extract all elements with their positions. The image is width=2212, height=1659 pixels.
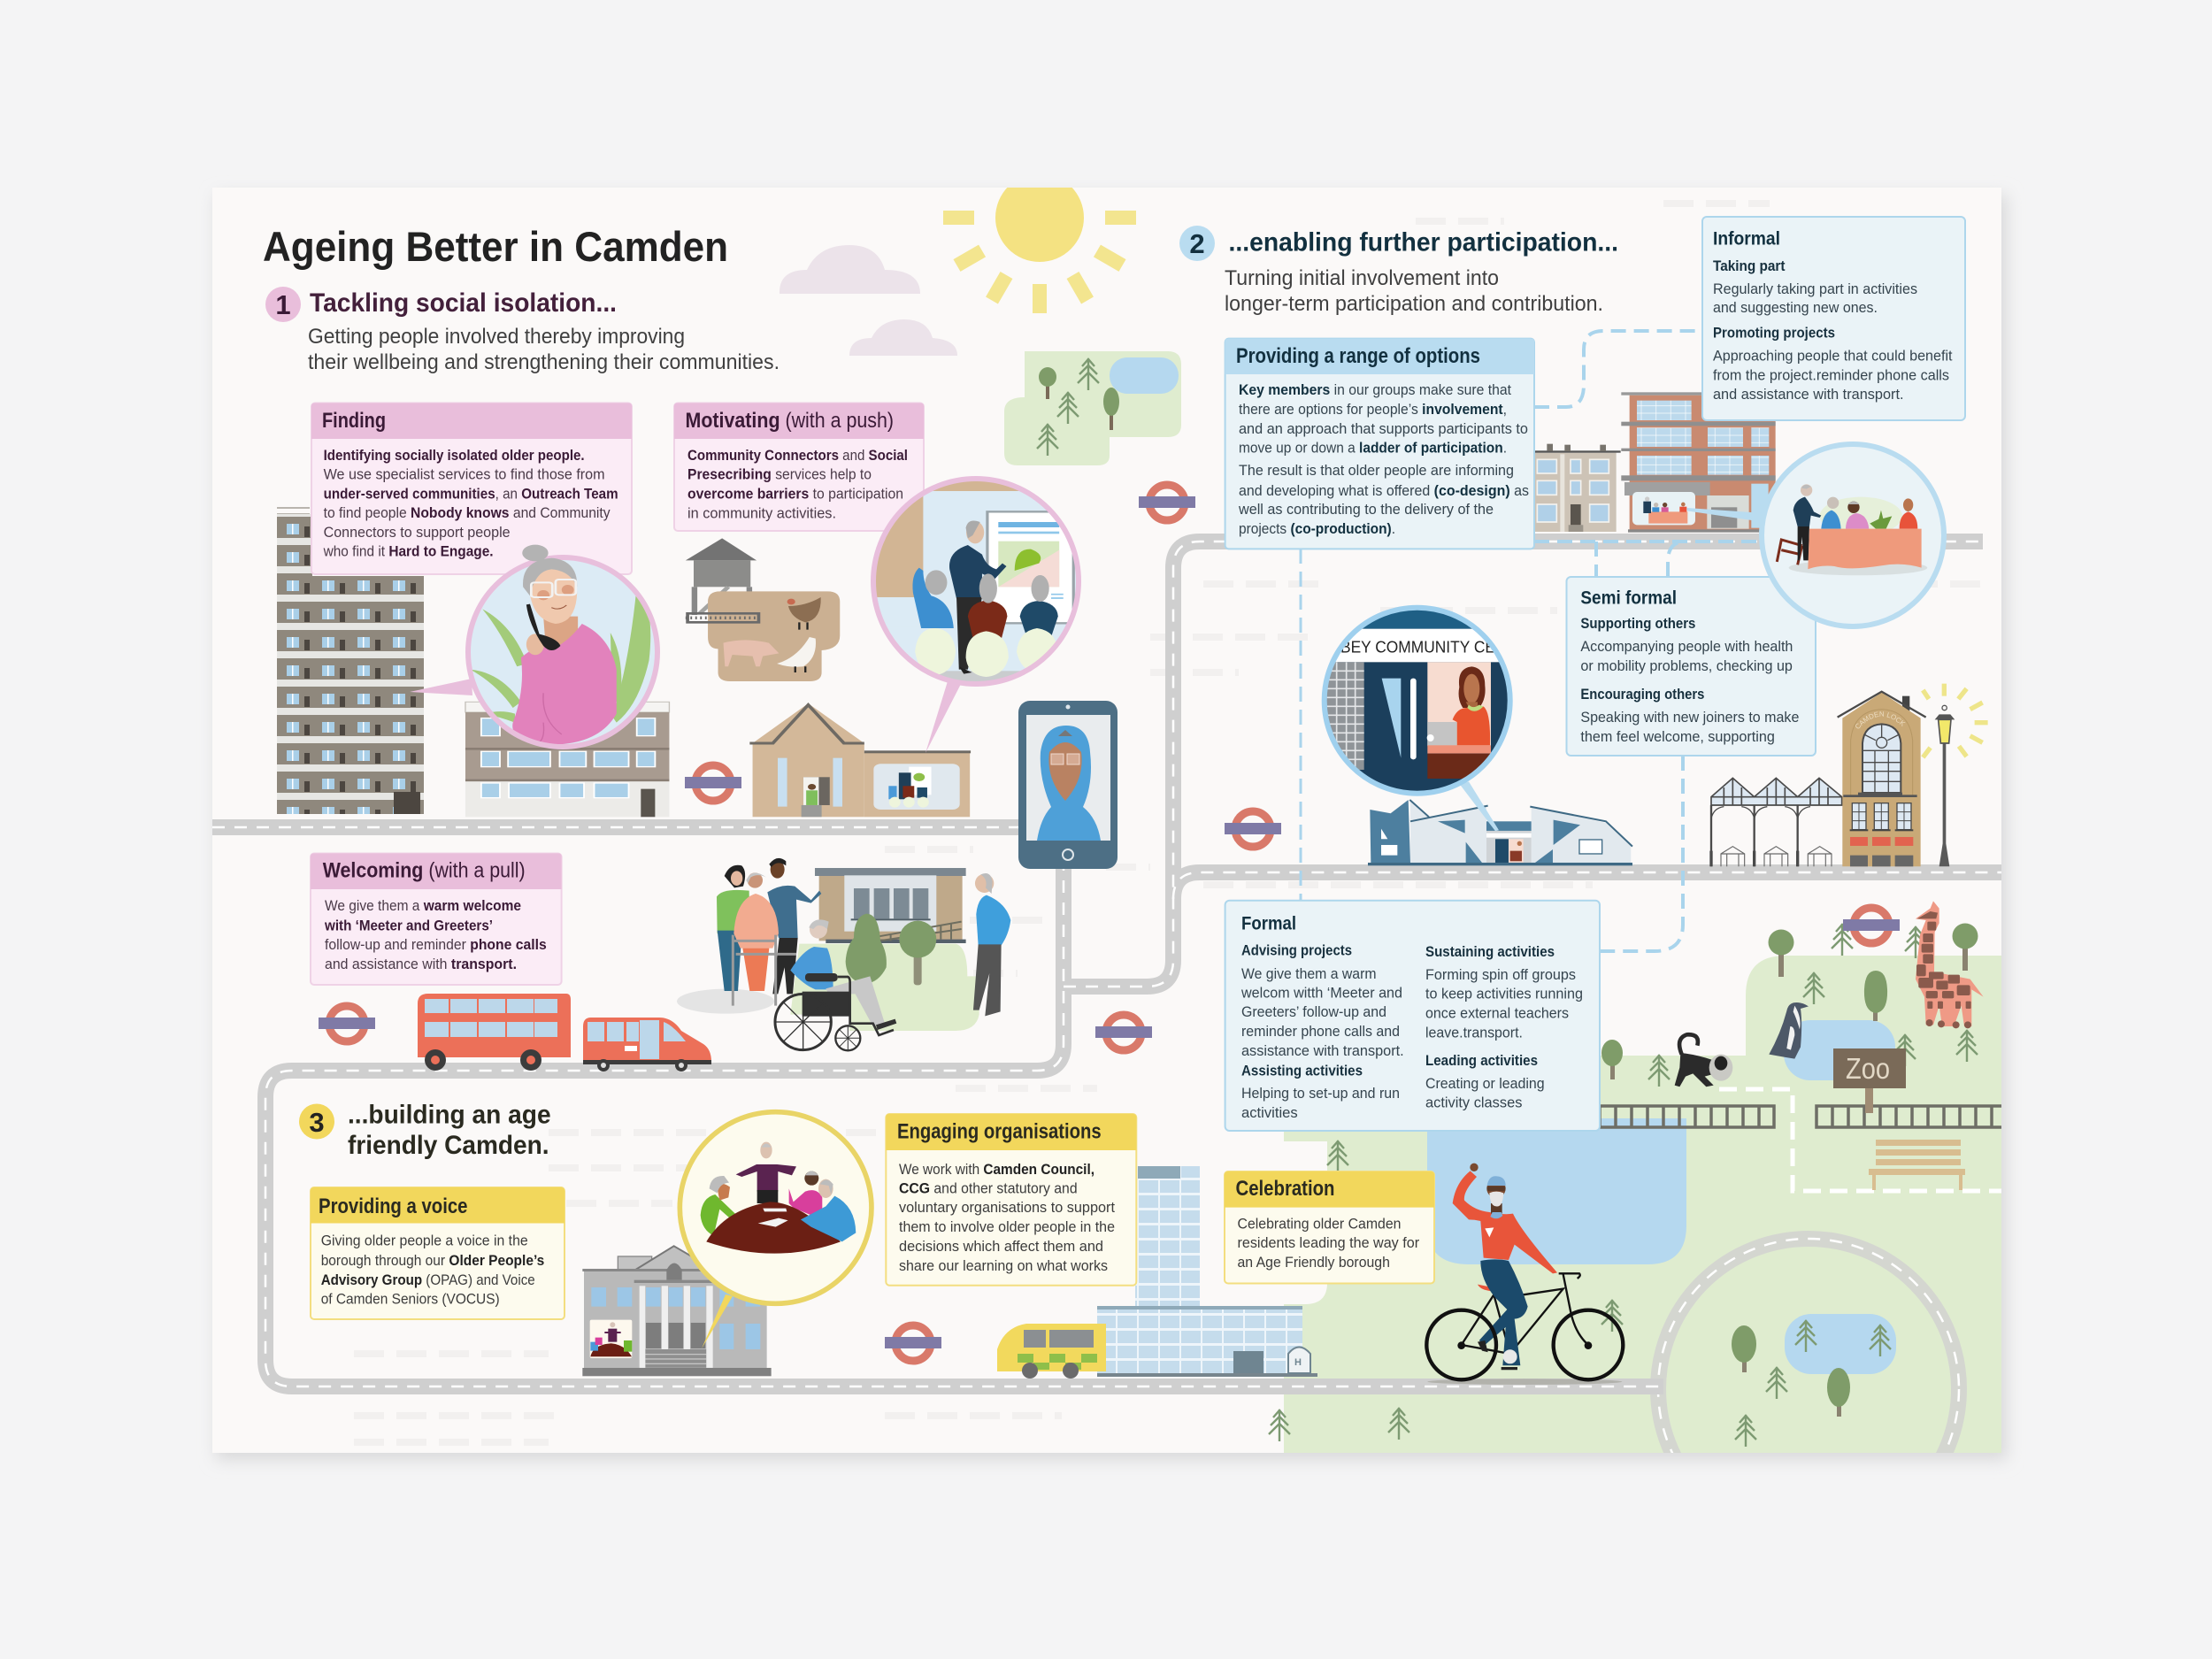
panel: welcoming: We give them a warm welcome <box>325 898 521 914</box>
panel: providing a range of options: well as contributing to the delivery of the <box>1238 502 1494 518</box>
panel: engaging organisations: share our learning on what works <box>899 1258 1108 1274</box>
section 3 heading: friendly Camden. <box>348 1131 549 1160</box>
abbey community centre building <box>1368 781 1632 865</box>
roundabout road <box>1650 1231 1967 1453</box>
panel: informal: Promoting projects <box>1713 325 1835 342</box>
zoo pond <box>1784 1020 1895 1080</box>
small park top <box>1004 351 1181 465</box>
section 1 heading: Getting people involved thereby improving <box>308 325 685 349</box>
panel: informal <box>1702 217 1965 420</box>
terrace building <box>1534 444 1621 532</box>
panel: finding: who find it Hard to Engage. <box>323 544 494 560</box>
section 2 heading <box>1179 226 1618 316</box>
panel: formal: Forming spin off groups <box>1425 967 1576 983</box>
panel: formal: Creating or leading <box>1425 1076 1545 1092</box>
panel: finding: We use specialist services to find those from <box>324 467 605 483</box>
panel: formal: Leading activities <box>1425 1052 1538 1069</box>
presentation circle <box>866 475 1086 688</box>
panel: providing a range of options: Providing a range of options <box>1236 344 1480 368</box>
panel: providing a voice: Giving older people a voice in the <box>321 1233 528 1248</box>
panel: finding: Connectors to support people <box>324 525 511 541</box>
camden lock building: CAMDEN LOCK <box>1855 711 1906 729</box>
low apartment block <box>465 702 669 817</box>
camden lock building <box>1837 690 1927 867</box>
road network <box>212 541 2001 1386</box>
panel: informal: Approaching people that could benefit <box>1713 349 1953 365</box>
panel: informal: and assistance with transport. <box>1713 387 1904 403</box>
dashed connector lines <box>1301 331 1761 951</box>
panel: providing a range of options: and developing what is offered (co-design) as <box>1239 483 1529 499</box>
fences <box>1600 1106 2004 1127</box>
panel: providing a range of options: Key members in our groups make sure that <box>1239 382 1511 398</box>
hospital: H <box>1294 1357 1302 1368</box>
panel: celebration: an Age Friendly borough <box>1237 1255 1390 1271</box>
section 1 heading: 1 <box>275 289 291 320</box>
poster background <box>212 188 2001 1453</box>
barn <box>686 538 757 615</box>
panel: celebration: residents leading the way for <box>1237 1235 1420 1251</box>
bus <box>418 994 571 1071</box>
panel: formal: activities <box>1241 1105 1298 1121</box>
panel: semi formal: Semi formal <box>1580 588 1677 609</box>
abbey community centre circle <box>1325 608 1513 794</box>
panel: welcoming: with ‘Meeter and Greeters’ <box>324 918 493 934</box>
meeting circle: older people around a table <box>680 1112 872 1303</box>
section 1 heading: Tackling social isolation... <box>310 288 617 318</box>
panel: engaging organisations: CCG and other statutory and <box>899 1180 1078 1196</box>
panel: providing a voice <box>311 1187 565 1319</box>
panel: motivating: in community activities. <box>687 506 836 522</box>
panel: providing a range of options: there are options for people’s involvement, <box>1239 402 1507 418</box>
section 1 heading <box>265 287 780 374</box>
market hall <box>1709 778 1842 866</box>
panel: formal: to keep activities running <box>1425 987 1583 1002</box>
panel: welcoming: Welcoming (with a pull) <box>323 859 526 883</box>
zoo sign <box>1833 1048 1906 1113</box>
panel: semi formal: Accompanying people with health <box>1580 639 1793 655</box>
panel: finding: Finding <box>322 409 386 433</box>
panel: formal: reminder phone calls and <box>1241 1024 1400 1040</box>
portrait tail <box>410 679 472 695</box>
panel: formal: We give them a warm <box>1241 966 1377 982</box>
street lamp <box>1923 684 1988 866</box>
hospital <box>1097 1166 1317 1377</box>
panel: formal: Advising projects <box>1241 942 1352 959</box>
panel: finding: under-served communities, an Outreach Team <box>324 486 618 502</box>
section 1 heading: their wellbeing and strengthening their communities. <box>308 350 780 374</box>
underground roundels <box>319 485 1900 1361</box>
panel: informal: Taking part <box>1713 257 1786 274</box>
penguin <box>1769 1002 1809 1059</box>
lake <box>1427 1118 1686 1264</box>
community centre <box>749 703 971 817</box>
giraffe <box>1916 901 1984 1028</box>
panel: providing a voice: of Camden Seniors (VOCUS) <box>321 1292 500 1308</box>
panel: finding <box>311 403 632 574</box>
brick building <box>1621 392 1776 533</box>
zoo sign: Zoo <box>1846 1052 1890 1085</box>
panel: semi formal: Encouraging others <box>1580 686 1704 703</box>
panel: formal: assistance with transport. <box>1241 1043 1404 1059</box>
panel: providing a voice: borough through our Older People’s <box>321 1253 544 1269</box>
courthouse <box>582 1246 772 1376</box>
abbey community centre circle: BEY COMMUNITY CE <box>1340 637 1495 656</box>
panel: engaging organisations: We work with Camden Council, <box>899 1162 1094 1178</box>
presentation tail <box>926 681 961 753</box>
panel: providing a range of options: projects (co-production). <box>1239 521 1395 537</box>
panel: providing a voice: Providing a voice <box>319 1194 467 1218</box>
panel: formal: once external teachers <box>1425 1005 1569 1021</box>
poster shadow <box>216 195 2007 1460</box>
park pond <box>1785 1314 1896 1374</box>
title: Ageing Better in Camden <box>263 223 728 270</box>
panel: motivating: overcome barriers to participation <box>687 487 903 503</box>
panel: finding: Identifying socially isolated older people. <box>324 448 585 464</box>
panel: engaging organisations: Engaging organisations <box>897 1120 1102 1143</box>
panel: engaging organisations: them to involve older people in the <box>899 1219 1115 1235</box>
panel: engaging organisations: voluntary organisations to support <box>899 1200 1115 1216</box>
panel: motivating: Motivating (with a push) <box>685 409 894 433</box>
minibus <box>583 1018 711 1071</box>
panel: finding: to find people Nobody knows and Community <box>324 505 611 521</box>
panel: providing a range of options: The result is that older people are informing <box>1239 463 1514 479</box>
park background <box>1274 956 2001 1453</box>
panel: celebration: Celebrating older Camden <box>1237 1216 1402 1232</box>
panel: informal: Regularly taking part in activities <box>1713 281 1917 297</box>
welcoming scene <box>677 858 1010 1050</box>
panel: formal: Sustaining activities <box>1425 943 1555 960</box>
panel: semi formal <box>1566 577 1816 756</box>
cyclist <box>1426 1164 1623 1385</box>
section 2 heading: ...enabling further participation... <box>1228 228 1618 257</box>
section 3 heading: 3 <box>309 1107 325 1138</box>
table circle: group around a table <box>1762 444 1944 626</box>
panel: welcoming <box>311 853 562 985</box>
panel: providing a voice: Advisory Group (OPAG) and Voice <box>321 1272 535 1288</box>
portrait circle: older woman on the phone <box>468 545 657 747</box>
section 3 heading <box>299 1101 551 1160</box>
ambulance <box>997 1324 1106 1379</box>
zoo footpath <box>1719 1089 2001 1191</box>
panel: informal: and suggesting new ones. <box>1713 300 1878 316</box>
panel: semi formal: or mobility problems, checking up <box>1580 658 1793 674</box>
panel: engaging organisations <box>886 1114 1136 1286</box>
section 3 heading: ...building an age <box>348 1101 551 1130</box>
panel: welcoming: and assistance with transport. <box>325 956 517 972</box>
panel: engaging organisations: decisions which affect them and <box>899 1239 1103 1255</box>
panel: informal: Informal <box>1713 229 1780 250</box>
panel: semi formal: Speaking with new joiners to make <box>1580 710 1799 726</box>
panel: providing a range of options <box>1225 339 1534 549</box>
sun <box>943 188 1136 313</box>
panel: formal: leave.transport. <box>1425 1025 1523 1041</box>
farm animals <box>686 591 840 681</box>
panel: formal: Assisting activities <box>1241 1062 1363 1079</box>
section 2 heading: longer-term participation and contribution. <box>1225 292 1603 316</box>
trees <box>1269 924 1978 1447</box>
panel: informal: from the project.reminder phone calls <box>1713 367 1949 383</box>
lemur <box>1675 1034 1732 1087</box>
panel: motivating <box>674 403 924 531</box>
panel: celebration <box>1225 1171 1434 1283</box>
panel: formal: welcom witth ‘Meeter and <box>1240 985 1402 1001</box>
panel: welcoming: follow-up and reminder phone calls <box>325 937 547 953</box>
cloud large <box>780 245 920 294</box>
panel: motivating: Presecribing services help to <box>687 467 872 483</box>
section 2 heading: Turning initial involvement into <box>1225 266 1499 290</box>
panel: semi formal: them feel welcome, supporting <box>1580 729 1775 745</box>
panel: formal: Helping to set-up and run <box>1241 1086 1400 1102</box>
panel: motivating: Community Connectors and Social <box>687 448 908 464</box>
meeting circle tail <box>702 1294 733 1348</box>
panel: semi formal: Supporting others <box>1580 615 1695 632</box>
panel: providing a range of options: move up or down a ladder of participation. <box>1239 441 1507 457</box>
phone <box>1018 701 1118 869</box>
panel: formal: Greeters’ follow-up and <box>1241 1004 1386 1020</box>
panel: formal: activity classes <box>1425 1095 1522 1111</box>
bench <box>1869 1140 1965 1190</box>
panel: celebration: Celebration <box>1235 1177 1334 1201</box>
section 2 heading: 2 <box>1189 228 1205 259</box>
panel: formal: Formal <box>1241 914 1296 934</box>
tower block <box>277 508 424 814</box>
panel: formal <box>1225 901 1600 1131</box>
panel: providing a range of options: and an approach that supports participants to <box>1239 421 1528 437</box>
cloud small <box>849 319 957 356</box>
